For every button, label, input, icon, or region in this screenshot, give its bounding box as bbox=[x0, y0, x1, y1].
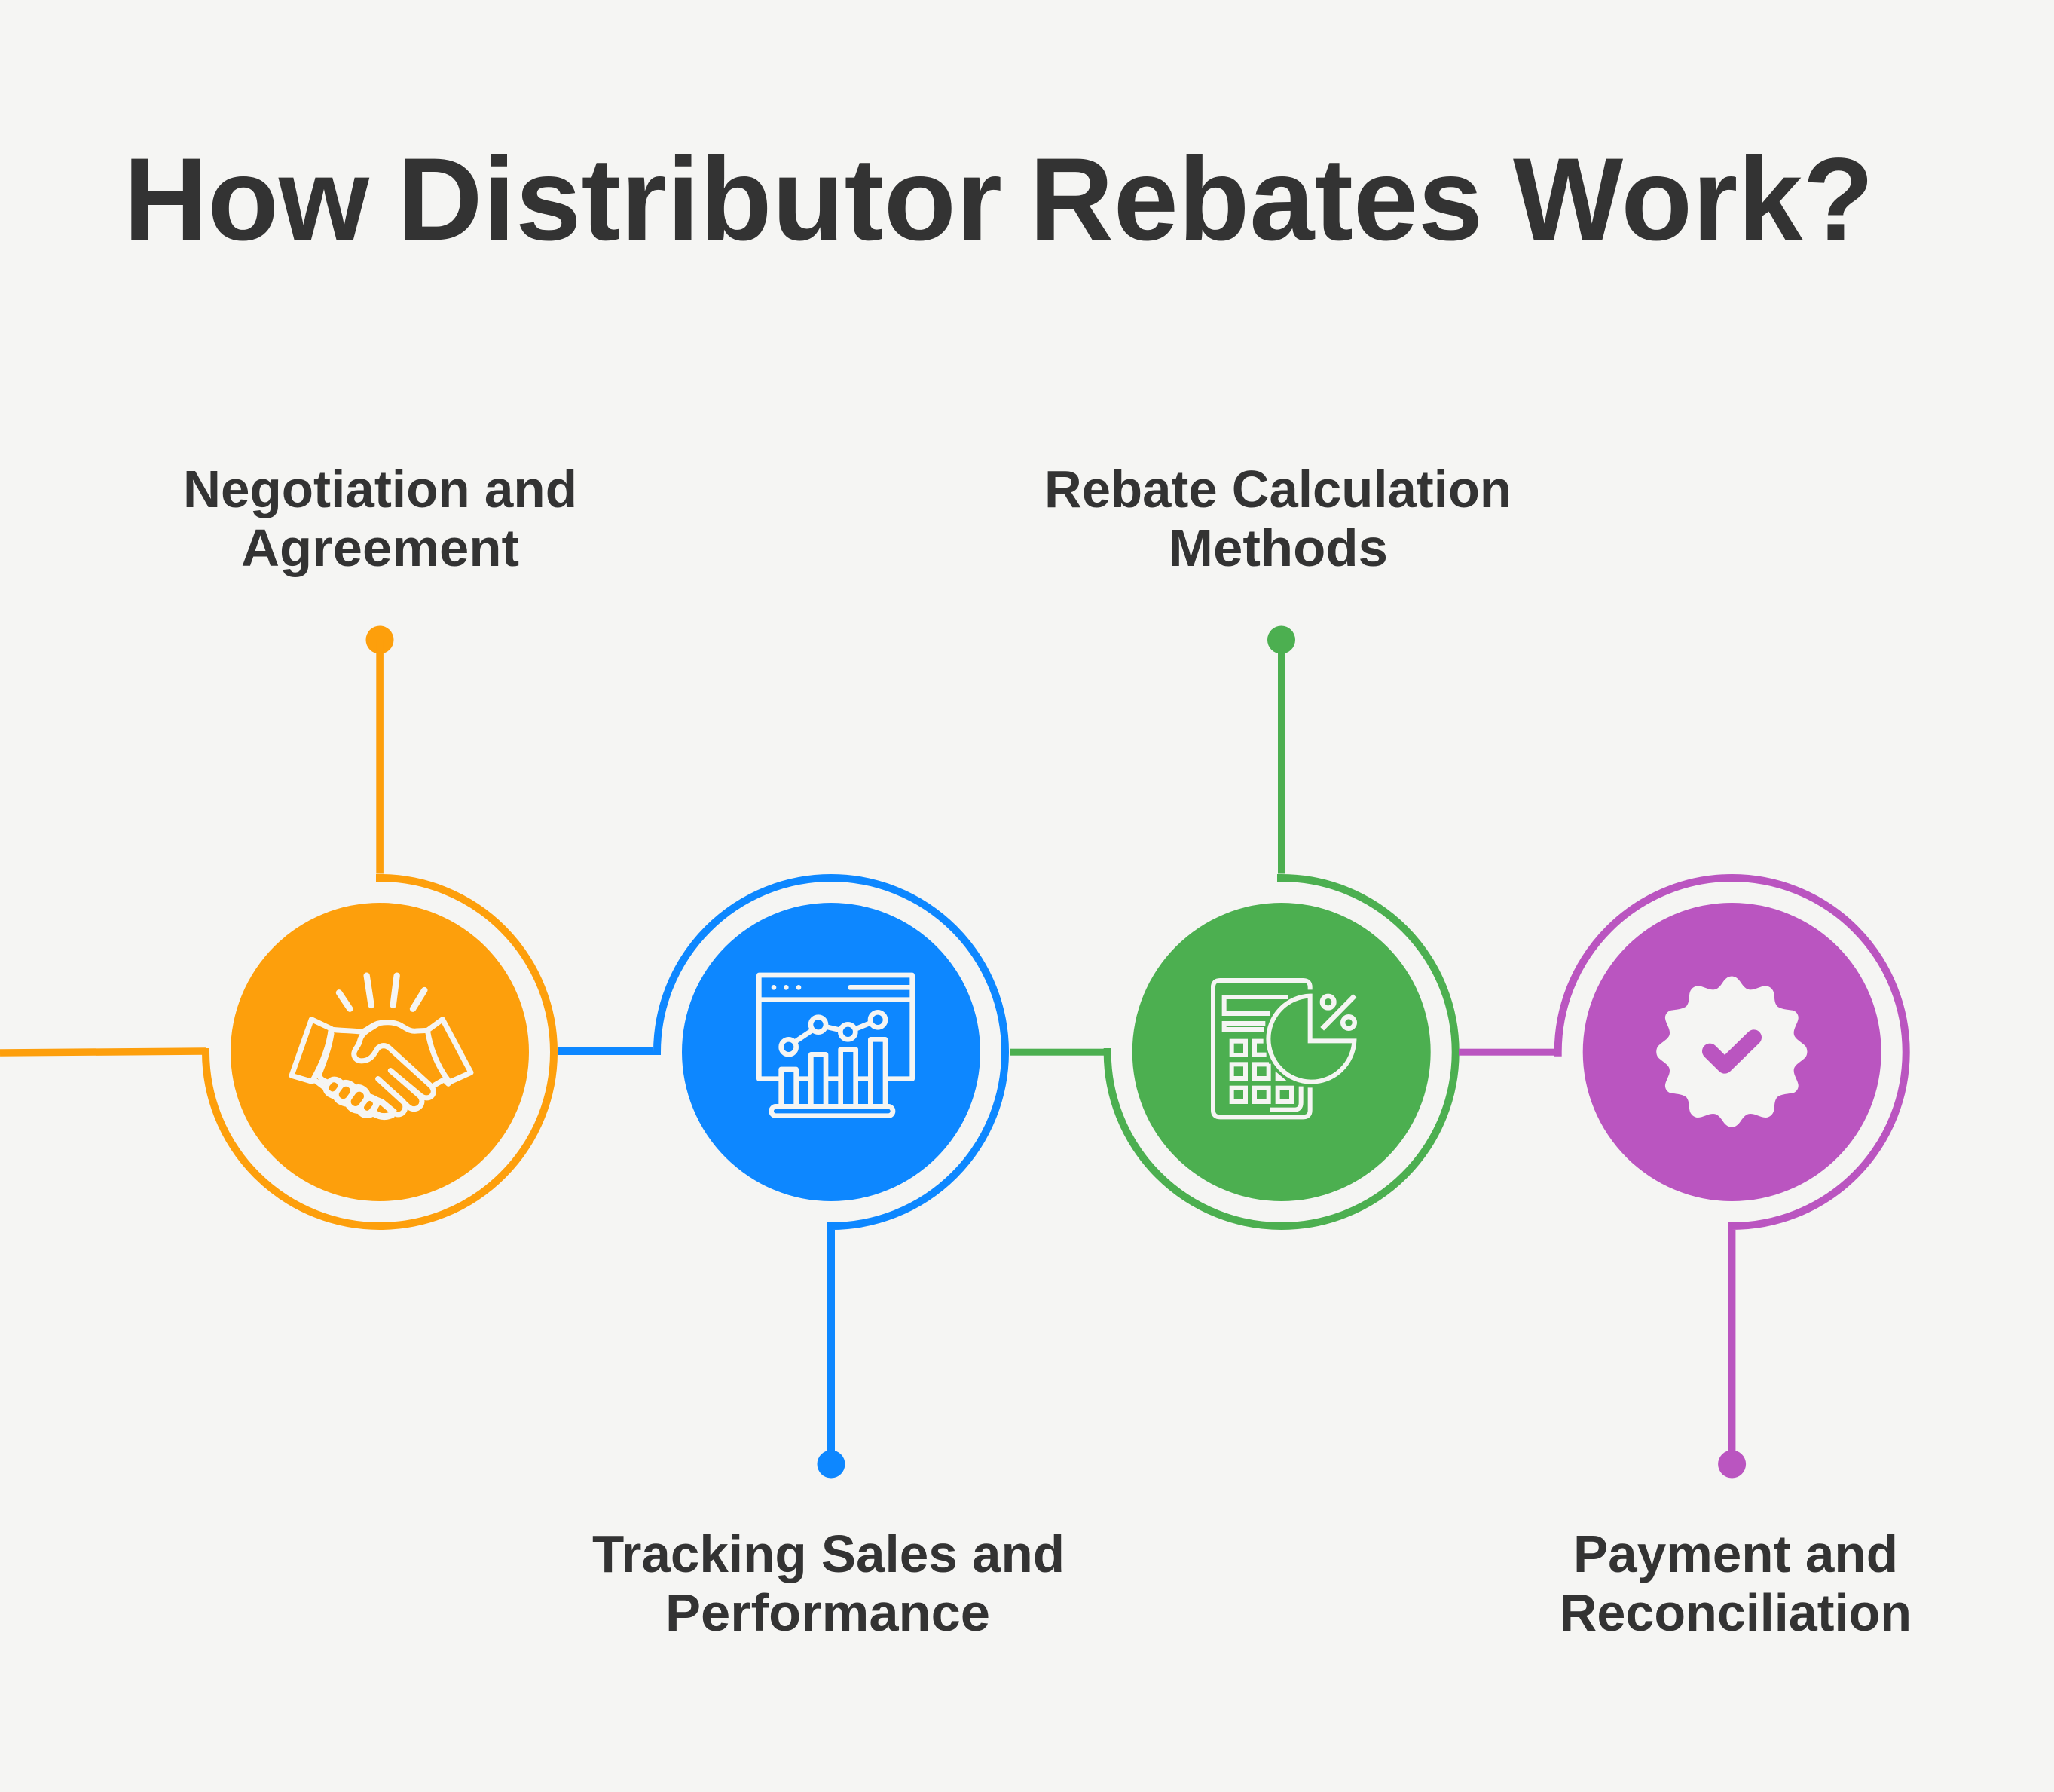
green ring arc bbox=[1108, 878, 1456, 1226]
connector: purple line and pin bbox=[1718, 1230, 1746, 1479]
label: rebate calculation methods bbox=[1044, 460, 1511, 577]
step 3: rebate calculation methods bbox=[1010, 460, 1511, 1226]
purple ring arc bbox=[1558, 878, 1906, 1226]
step 2: tracking sales and performance bbox=[558, 878, 1065, 1642]
label: negotiation and agreement bbox=[183, 460, 577, 577]
label: negotiation and agreement: Agreement bbox=[241, 518, 519, 577]
connector: orange pin and line bbox=[366, 625, 393, 874]
green link line bbox=[1010, 1049, 1105, 1056]
blue link line bbox=[558, 1047, 653, 1055]
title: Rebates bbox=[1029, 134, 1483, 265]
label: payment and reconciliation: Reconciliation bbox=[1560, 1583, 1912, 1642]
label: tracking sales and performance bbox=[592, 1524, 1065, 1642]
connector: blue line and pin bbox=[817, 1230, 845, 1479]
label: tracking sales and performance: Tracking Sales and bbox=[592, 1524, 1065, 1583]
label: rebate calculation methods: Methods bbox=[1169, 518, 1388, 577]
title: Work? bbox=[1513, 134, 1874, 265]
title bbox=[124, 134, 1874, 265]
orange ring arc bbox=[206, 878, 554, 1226]
label: tracking sales and performance: Performance bbox=[665, 1583, 990, 1642]
icon: verified badge with check bbox=[1656, 977, 1807, 1127]
connector: green pin and line bbox=[1267, 625, 1295, 874]
label: negotiation and agreement: Negotiation and bbox=[183, 460, 577, 518]
purple link line bbox=[1459, 1049, 1554, 1056]
blue disc bbox=[682, 903, 980, 1201]
icon: handshake bbox=[292, 976, 471, 1120]
icon: calculator with pie chart and percent bbox=[1213, 980, 1355, 1117]
blue ring arc bbox=[657, 878, 1005, 1226]
label: payment and reconciliation bbox=[1560, 1524, 1912, 1642]
orange disc bbox=[231, 903, 529, 1201]
label: rebate calculation methods: Rebate Calculation bbox=[1044, 460, 1511, 518]
icon: browser window with chart bbox=[759, 975, 912, 1116]
label: payment and reconciliation: Payment and bbox=[1573, 1524, 1898, 1583]
step 1: negotiation and agreement bbox=[0, 460, 577, 1226]
green disc bbox=[1132, 903, 1431, 1201]
step 4: payment and reconciliation bbox=[1459, 878, 1912, 1642]
incoming line from left edge bbox=[0, 1051, 206, 1053]
purple disc bbox=[1583, 903, 1881, 1201]
title: How bbox=[124, 134, 370, 265]
title: Distributor bbox=[397, 134, 1002, 265]
